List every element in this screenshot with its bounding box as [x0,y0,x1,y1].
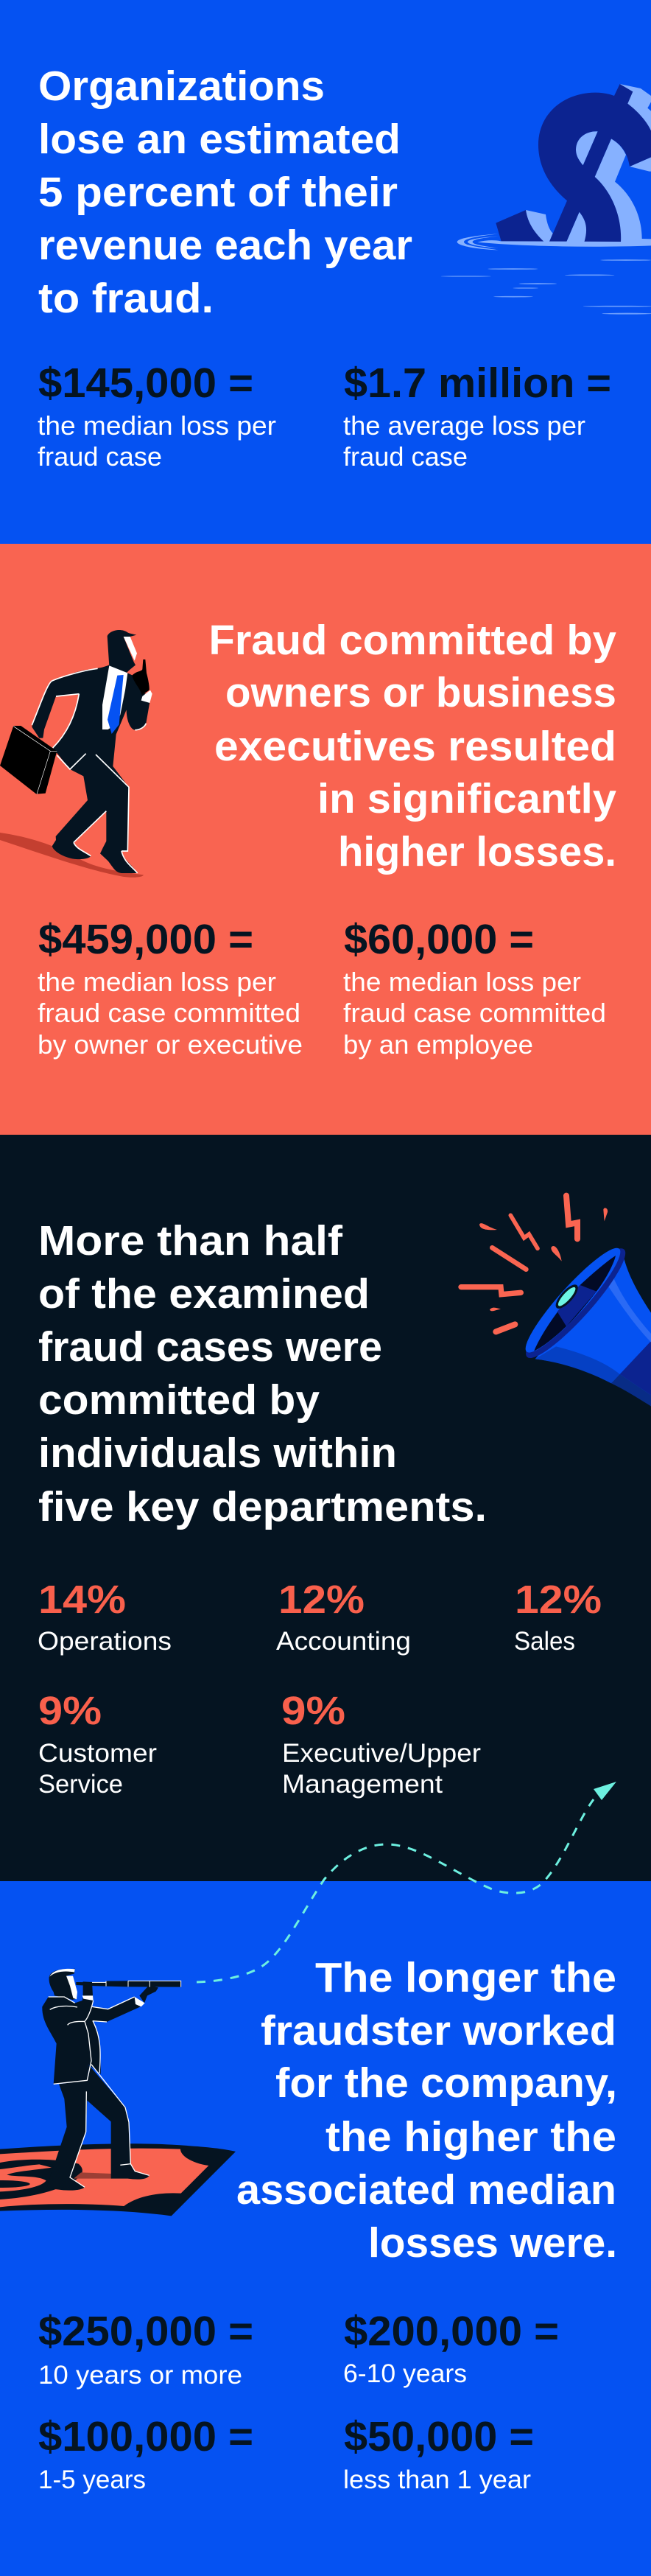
stat: executive management 9% [281,1689,481,1799]
heading: the longer the fraudster worked: for the company, [275,2059,617,2107]
panel: owners and executives [0,544,651,1135]
heading: the longer the fraudster worked: The longer the [315,1954,616,2001]
heading: more than half of cases: fraud cases were [38,1323,382,1371]
stat: accounting 12%: 12% [278,1578,365,1622]
stat: less than 1 year: less than 1 year [343,2465,531,2494]
stat: less than 1 year: $50,000 = [344,2413,534,2460]
heading: more than half of cases: individuals within [38,1429,397,1477]
stat: executive management 9%: Executive/Upper [282,1739,481,1768]
heading: fraud committed by owners: owners or business [225,669,616,716]
heading: organizations lose 5 percent: to fraud. [38,275,214,322]
stat: accounting 12%: Accounting [276,1627,411,1656]
stat: average loss: $1.7 million = [344,360,611,407]
stat: sales 12%: Sales [514,1627,575,1656]
heading: more than half of cases [38,1217,487,1530]
stat: owner or executive median loss: fraud case committed [38,998,300,1028]
stat: customer service 9%: 9% [38,1689,102,1733]
panel: five key departments [0,1135,651,1881]
stat: operations 14%: 14% [38,1578,126,1622]
stat: 6-10 years [343,2308,559,2388]
stat: customer service 9%: Service [38,1770,123,1799]
stat: 10 years or more [38,2308,253,2390]
stat: average loss: fraud case [343,441,468,472]
heading: organizations lose 5 percent [38,63,412,322]
heading: fraud committed by owners: Fraud committed by [209,617,616,664]
heading: more than half of cases: More than half [38,1217,343,1264]
stat: owner or executive median loss [38,916,303,1060]
heading: more than half of cases: five key departments. [38,1483,487,1530]
stat: executive management 9%: Management [282,1770,443,1799]
icon: sneaking businessman with briefcase [0,630,152,878]
arrow: dashed teal path from telescope [197,1782,616,1982]
heading: the longer the fraudster worked [236,1954,617,2267]
icon: man with telescope on banknote [0,1969,236,2216]
stat: owner or executive median loss: $459,000 = [38,916,253,963]
stat: median loss: fraud case [38,441,162,472]
stat: accounting 12% [276,1578,411,1656]
heading: the longer the fraudster worked: losses were. [368,2219,617,2267]
heading: organizations lose 5 percent: Organizations [38,63,325,110]
stat: median loss: the median loss per [38,410,276,441]
stat: owner or executive median loss: by owner or executive [38,1029,303,1060]
heading: organizations lose 5 percent: lose an estimated [38,116,401,163]
icon: sinking dollar sign [441,84,651,315]
stat: 10 years or more: $250,000 = [38,2308,253,2355]
stat: employee median loss: $60,000 = [344,916,534,963]
stat: less than 1 year [343,2413,534,2494]
heading: more than half of cases: committed by [38,1376,320,1424]
stat: 1-5 years [38,2413,253,2494]
heading: fraud committed by owners: in significantly [317,775,616,822]
heading: fraud committed by owners: executives resulted [214,723,616,770]
stat: average loss: the average loss per [343,410,585,441]
heading: fraud committed by owners [209,617,616,875]
stat: customer service 9% [38,1689,157,1799]
stat: 1-5 years: 1-5 years [38,2465,146,2494]
stat: 10 years or more: 10 years or more [38,2361,242,2390]
stat: operations 14% [38,1578,172,1656]
stat: operations 14%: Operations [38,1627,172,1656]
heading: organizations lose 5 percent: 5 percent of their [38,169,398,216]
heading: fraud committed by owners: higher losses. [338,828,616,875]
stat: customer service 9%: Customer [38,1739,157,1768]
stat: sales 12% [514,1578,602,1656]
heading: the longer the fraudster worked: the higher the [326,2113,616,2160]
heading: more than half of cases: of the examined [38,1270,370,1317]
stat: employee median loss [343,916,606,1060]
stat: median loss: $145,000 = [38,360,253,407]
stat: employee median loss: fraud case committed [343,998,606,1028]
stat: average loss [343,360,611,472]
stat: employee median loss: the median loss per [343,967,581,997]
heading: organizations lose 5 percent: revenue each year [38,222,412,269]
stat: 1-5 years: $100,000 = [38,2413,253,2460]
icon: megaphone with sound bolts [461,1196,651,1406]
stat: sales 12%: 12% [515,1578,602,1622]
panel: estimated revenue lost [0,0,651,544]
heading: the longer the fraudster worked: associated median [236,2166,616,2213]
stat: owner or executive median loss: the median loss per [38,967,276,997]
panel: tenure and losses [0,1881,651,2576]
stat: executive management 9%: 9% [281,1689,345,1733]
stat: employee median loss: by an employee [343,1029,533,1060]
stat: 6-10 years: $200,000 = [344,2308,559,2355]
stat: 6-10 years: 6-10 years [343,2359,467,2388]
stat: median loss [38,360,276,472]
heading: the longer the fraudster worked: fraudster worked [261,2007,616,2054]
